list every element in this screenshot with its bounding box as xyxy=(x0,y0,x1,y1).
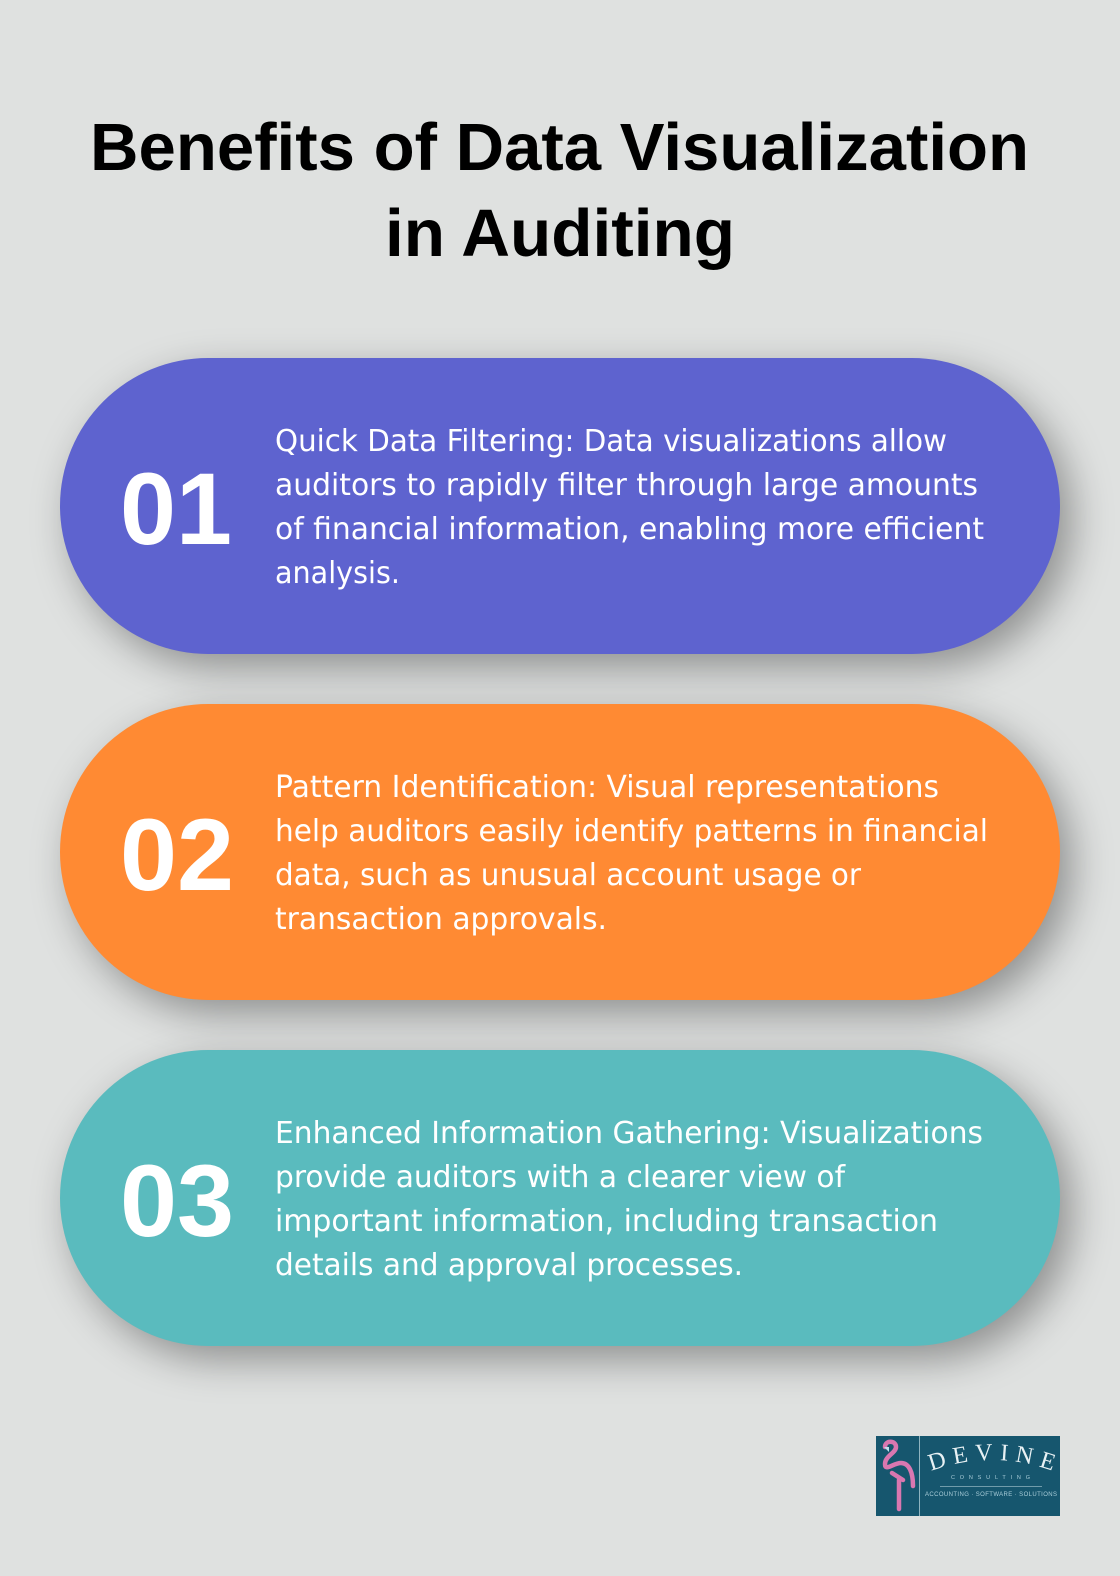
text block: card 02: data, such as unusual account usage or xyxy=(275,858,861,893)
icon: flamingo xyxy=(885,1442,913,1509)
text block: card 01: analysis. xyxy=(275,556,400,591)
text block: card 02 xyxy=(275,770,988,937)
number 03: 03 xyxy=(120,1144,234,1258)
text block: card 01: Quick Data Filtering: Data visualizations allow xyxy=(275,424,947,459)
panel: card 03 background xyxy=(60,1050,1060,1346)
text block: card 03 xyxy=(275,1116,983,1283)
title xyxy=(90,110,1029,271)
text block: card 02: Pattern Identification: Visual representations xyxy=(275,770,939,805)
title: Benefits of Data Visualization xyxy=(90,110,1029,185)
text block: card 03: Enhanced Information Gathering: Visualizations xyxy=(275,1116,983,1151)
text block: card 03: provide auditors with a clearer view of xyxy=(275,1160,846,1195)
text block: card 02: transaction approvals. xyxy=(275,902,607,937)
panel: card 02 background xyxy=(60,704,1060,1000)
logo: Devine Consulting xyxy=(876,1436,1060,1516)
logo subtitle: CONSULTING xyxy=(951,1475,1030,1481)
logo tagline: ACCOUNTING · SOFTWARE · SOLUTIONS xyxy=(925,1492,1057,1498)
text block: card 01: auditors to rapidly filter through large amounts xyxy=(275,468,978,503)
text block: card 03: details and approval processes. xyxy=(275,1248,743,1283)
number 01: 01 xyxy=(120,452,232,566)
text block: card 01: of financial information, enabling more efficient xyxy=(275,512,984,547)
text block: card 02: help auditors easily identify patterns in financial xyxy=(275,814,988,849)
text block: card 03: important information, including transaction xyxy=(275,1204,938,1239)
panel: card 01 background xyxy=(60,358,1060,654)
number 02: 02 xyxy=(120,798,234,912)
title: in Auditing xyxy=(385,196,735,271)
text block: card 01 xyxy=(275,424,984,591)
logo wordmark: DEVINE xyxy=(927,1444,1056,1470)
